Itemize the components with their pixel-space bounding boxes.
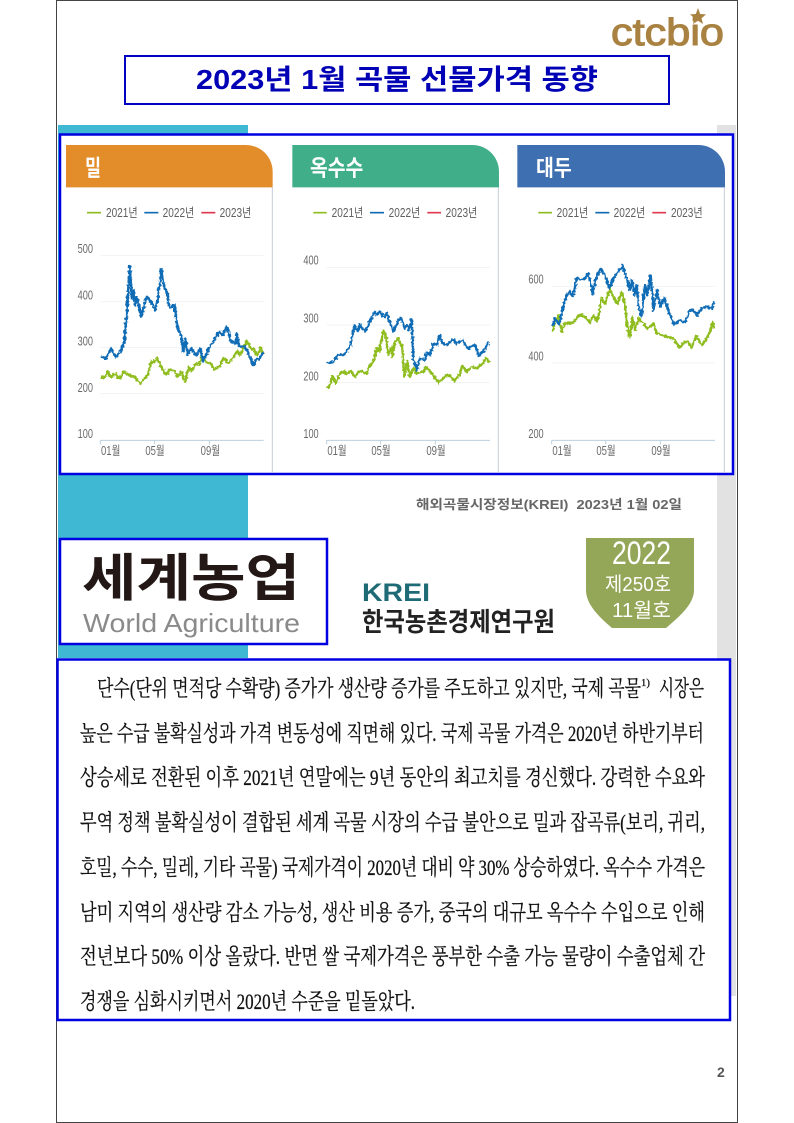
- axis labels: 09월: [651, 444, 671, 458]
- panel header: soybean: [517, 145, 725, 187]
- axis labels: 500: [78, 242, 93, 256]
- panel header: corn: [292, 145, 499, 187]
- axis labels: 200: [303, 369, 319, 383]
- axis labels: 05월: [145, 444, 165, 458]
- legend: 2022년: [614, 206, 645, 220]
- axis labels: 01월: [327, 444, 347, 458]
- legend: 2021년: [332, 206, 363, 220]
- axis labels: 400: [303, 254, 319, 268]
- text block: 시장은: [659, 676, 704, 701]
- legend: [538, 206, 703, 220]
- line: 2022: [327, 312, 489, 370]
- line: 2021: [553, 288, 714, 348]
- line: 2022: [552, 266, 714, 327]
- logo: world agriculture: World Agriculture: [83, 608, 300, 638]
- panel header: wheat: 밀: [85, 155, 101, 181]
- text block: 1): [641, 678, 650, 689]
- panel: soybean chart: [517, 145, 725, 473]
- text block: [58, 660, 730, 1020]
- panel header: corn: 옥수수: [310, 155, 363, 181]
- panel header: soybean: 대두: [536, 155, 572, 181]
- panel: corn chart: [292, 145, 499, 473]
- axis labels: [78, 242, 220, 458]
- axis labels: 05월: [371, 444, 391, 458]
- text block: 경쟁을 심화시키면서 2020년 수준을 밑돌았다.: [80, 989, 415, 1014]
- legend: 2021년: [557, 206, 588, 220]
- axis labels: 100: [78, 427, 93, 441]
- legend: 2022년: [163, 206, 194, 220]
- axis labels: 400: [528, 349, 544, 363]
- panel header: wheat: [66, 145, 273, 187]
- title: 2023년 1월 곡물 선물가격 동향: [196, 64, 598, 95]
- axis labels: 400: [78, 288, 93, 302]
- issue badge: 제250호: [605, 573, 671, 596]
- axis labels: 300: [303, 312, 319, 326]
- page number: 2: [717, 1064, 725, 1080]
- logo: ctcbio: ctcbio: [611, 12, 724, 54]
- axis labels: 01월: [101, 444, 120, 458]
- text block: 단수(단위 면적당 수확량) 증가가 생산량 증가를 주도하고 있지만, 국제 곡물: [97, 676, 641, 701]
- teal background band: [58, 125, 248, 658]
- logo: world agriculture: 세계농업: [82, 550, 300, 607]
- line: 2022: [101, 266, 263, 366]
- axis labels: 100: [303, 427, 319, 441]
- panel: wheat chart: [66, 145, 273, 473]
- legend: 2023년: [446, 206, 477, 220]
- axis labels: [528, 273, 671, 458]
- axis labels: 09월: [201, 444, 220, 458]
- line: 2021: [101, 341, 263, 383]
- issue badge: 2022: [612, 535, 671, 571]
- axis labels: 600: [528, 273, 544, 287]
- legend: 2023년: [220, 206, 251, 220]
- logo: KREI: 한국농촌경제연구원: [362, 607, 555, 637]
- logo: KREI: KREI: [362, 579, 430, 607]
- axis labels: 05월: [596, 444, 616, 458]
- legend: [313, 206, 477, 220]
- issue badge: 11월호: [612, 599, 671, 622]
- axis labels: 200: [528, 427, 544, 441]
- legend: 2022년: [389, 206, 420, 220]
- source note: 해외곡물시장정보(KREI) 2023년 1월 02일: [416, 497, 682, 512]
- legend: 2023년: [671, 206, 703, 220]
- title: [125, 56, 669, 104]
- axis labels: [303, 254, 446, 458]
- axis labels: 200: [78, 381, 93, 395]
- legend: 2021년: [106, 206, 138, 220]
- line: 2021: [327, 331, 489, 388]
- axis labels: 09월: [426, 444, 446, 458]
- axis labels: 300: [78, 334, 93, 348]
- grey background strip: [717, 125, 736, 996]
- logo: world agriculture: [60, 539, 327, 644]
- legend: [87, 206, 251, 220]
- charts frame: [60, 134, 733, 474]
- issue badge: [586, 535, 694, 628]
- axis labels: 01월: [552, 444, 572, 458]
- logo: KREI: [362, 579, 555, 637]
